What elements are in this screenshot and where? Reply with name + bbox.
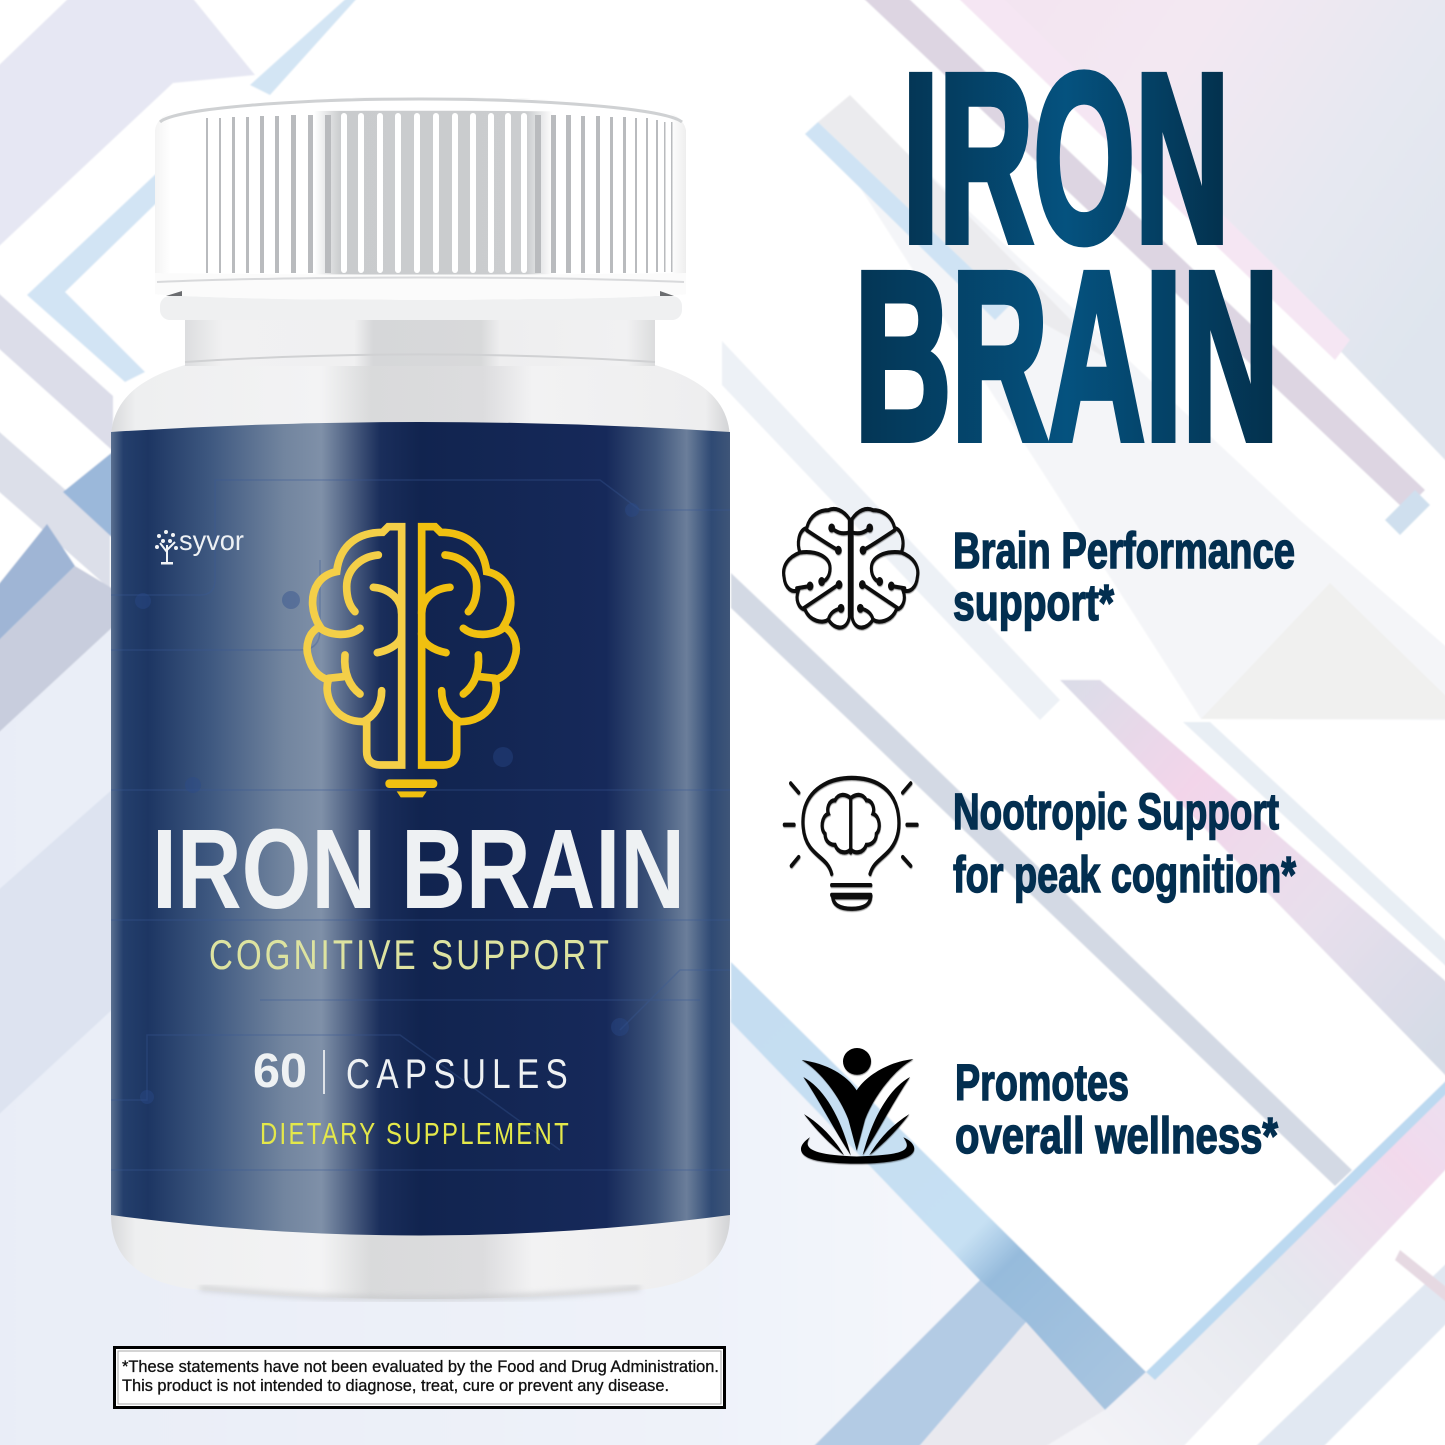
- label logo: syvor: [156, 525, 244, 564]
- text: brain performance support: support*: [953, 574, 1114, 631]
- feature: overall wellness: [801, 1048, 1278, 1164]
- icon: wellness figure: [801, 1048, 914, 1164]
- label icon: gold brain bulb: [307, 527, 516, 797]
- icon: light bulb brain: [784, 778, 917, 909]
- disclaimer box: [114, 1348, 724, 1408]
- bottle body: [111, 296, 730, 1299]
- text: nootropic support for peak cognition: [953, 783, 1296, 903]
- text: brain performance support: Brain Performance: [953, 522, 1295, 579]
- disclaimer box: *These statements have not been evaluated by the Food and Drug Administration.: [122, 1358, 719, 1376]
- title: [854, 24, 1279, 490]
- label logo: syvor: syvor: [179, 525, 244, 556]
- label product name: IRON BRAIN: [152, 806, 685, 932]
- text: nootropic support for peak cognition: for peak cognition*: [953, 846, 1296, 903]
- text: promotes overall wellness: overall wellness*: [955, 1107, 1278, 1164]
- feature: nootropic support: [784, 778, 1296, 909]
- label dietary supplement: DIETARY SUPPLEMENT: [260, 1116, 571, 1151]
- icon: circuit brain: [784, 509, 918, 628]
- text: brain performance support: [953, 522, 1295, 631]
- label capsule count: [253, 1045, 574, 1098]
- text: nootropic support for peak cognition: Nootropic Support: [953, 783, 1279, 840]
- bottle label: [111, 422, 730, 1236]
- text: promotes overall wellness: [955, 1054, 1278, 1164]
- label subtitle: COGNITIVE SUPPORT: [209, 931, 612, 978]
- bottle cap: [155, 98, 686, 300]
- text: promotes overall wellness: Promotes: [955, 1054, 1129, 1111]
- feature: brain performance: [784, 509, 1295, 631]
- product bottle: [111, 98, 730, 1299]
- disclaimer box: This product is not intended to diagnose, treat, cure or prevent any disease.: [122, 1377, 669, 1395]
- label capsule count: CAPSULES: [346, 1050, 574, 1097]
- label capsule count: 60: [253, 1045, 307, 1098]
